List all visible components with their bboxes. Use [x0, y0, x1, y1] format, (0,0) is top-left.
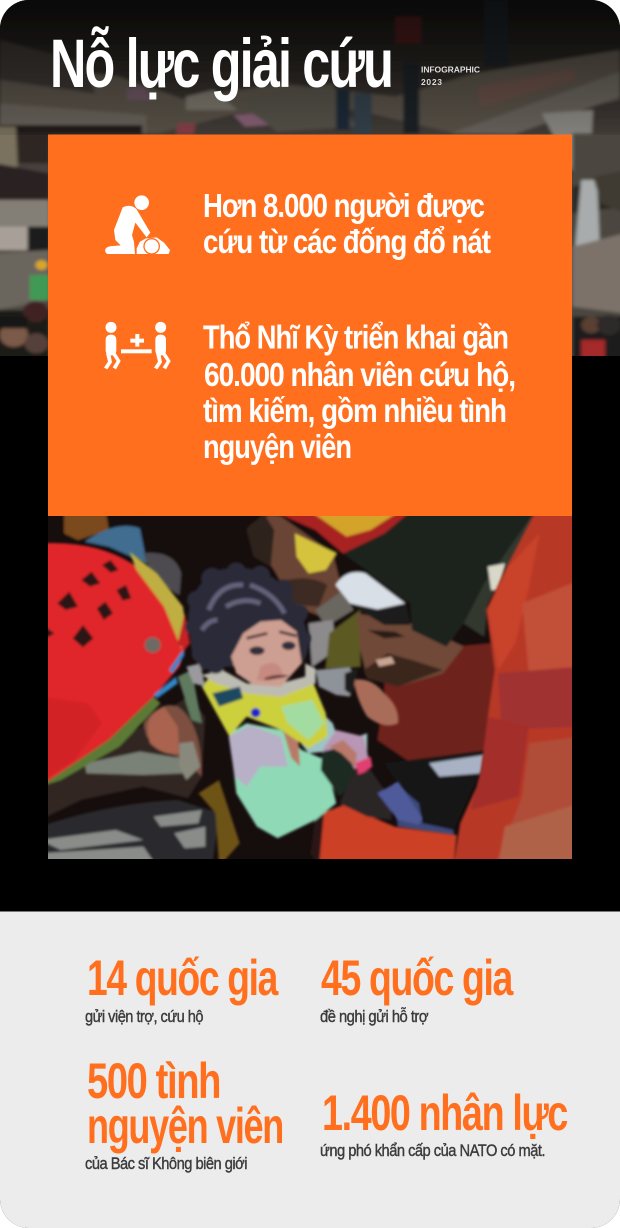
panel: statistics — [0, 912, 620, 1228]
white cap — [336, 571, 410, 625]
stat: 45 countries: 45 quốc gia — [321, 950, 514, 1006]
stat: 1,400 personnel: ứng phó khẩn cấp của NATO có mặt. — [320, 1141, 545, 1160]
stat: 500 volunteers — [85, 1053, 283, 1173]
text: rescued people: cứu từ các đống đổ nát — [203, 224, 491, 261]
text: rescue personnel — [203, 320, 515, 466]
infographic year label: INFOGRAPHIC — [421, 64, 480, 74]
text: rescue personnel: 60.000 nhân viên cứu hộ, — [204, 357, 515, 394]
hair highlights — [202, 585, 285, 630]
stat: 45 countries: đề nghị gửi hỗ trợ — [320, 1007, 428, 1026]
stat: 1,400 personnel — [320, 1092, 568, 1160]
stat: 500 volunteers: nguyện viên — [87, 1098, 283, 1154]
yellow neck collar — [202, 673, 328, 748]
child hair — [185, 562, 311, 674]
text: rescue personnel: Thổ Nhĩ Kỳ triển khai gần — [203, 320, 508, 356]
red helmet — [40, 543, 188, 787]
infographic year label: 2023 — [421, 77, 442, 87]
red and yellow helmet — [280, 516, 408, 556]
stat: 500 volunteers: của Bác sĩ Không biên giới — [85, 1154, 247, 1173]
title: Nỗ lực giải cứu — [50, 25, 392, 102]
stat: 14 countries: gửi viện trợ, cứu hộ — [85, 1007, 203, 1026]
text: rescue personnel: tìm kiếm, gồm nhiều tình — [203, 393, 506, 430]
man under red helmet — [40, 697, 205, 820]
text: rescued people: Hơn 8.000 người được — [203, 188, 484, 225]
panel: orange key facts — [48, 134, 572, 516]
black hood — [343, 510, 536, 647]
stat: 45 countries — [320, 950, 514, 1026]
icon: two people carrying a stretcher — [104, 322, 171, 369]
child face — [231, 620, 302, 687]
scarf — [40, 800, 219, 867]
stat: 14 countries — [85, 950, 279, 1026]
stat: 500 volunteers: 500 tình — [87, 1053, 220, 1109]
photo: rescuers holding a child — [40, 510, 580, 870]
icon: rescuer performing CPR — [105, 195, 170, 255]
rescuer hand — [353, 679, 398, 726]
text: rescue personnel: nguyện viên — [203, 429, 351, 466]
stat: 14 countries: 14 quốc gia — [87, 950, 279, 1006]
rescuer face right — [357, 613, 464, 687]
text: rescued people — [203, 188, 491, 261]
child fleece — [229, 723, 336, 838]
red jacket — [453, 510, 580, 867]
infographic year label — [421, 66, 480, 85]
header photo: collapsed building rubble — [0, 0, 620, 360]
